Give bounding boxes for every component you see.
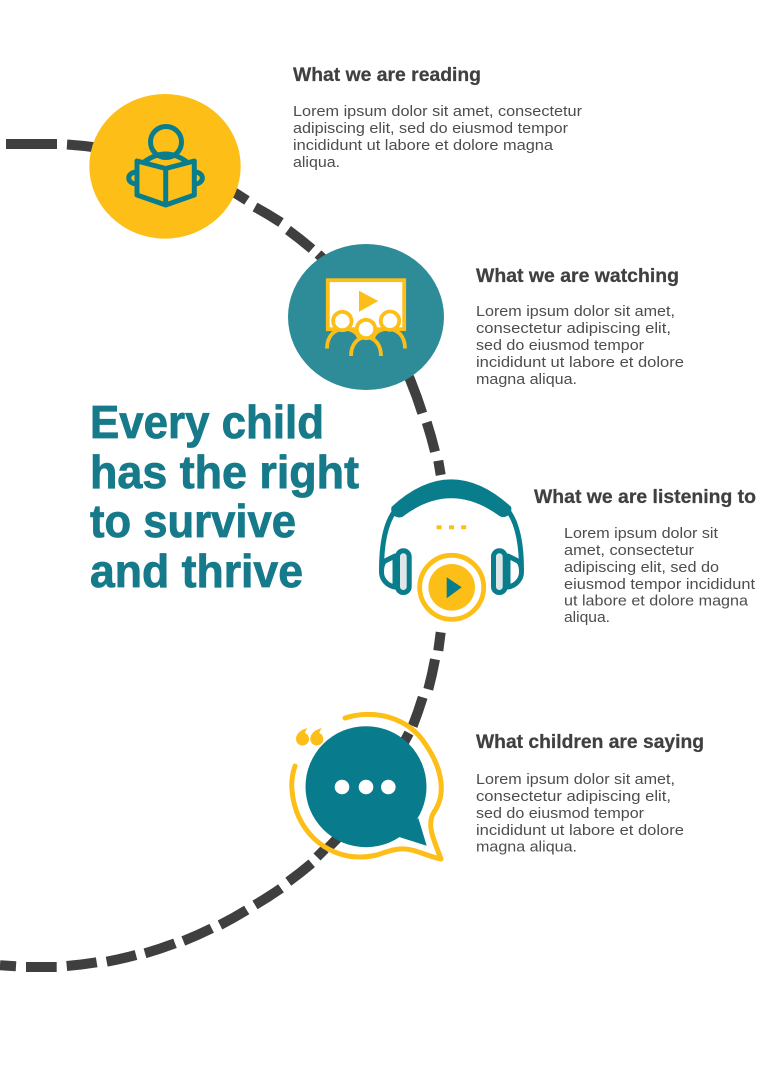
text block: children saying: What children are saying xyxy=(476,731,704,753)
text block: reading: incididunt ut labore et dolore magna xyxy=(293,137,554,154)
text block: watching: magna aliqua. xyxy=(476,371,577,388)
text block: children saying xyxy=(476,731,704,856)
headline: to survive xyxy=(90,495,296,547)
text block: children saying: Lorem ipsum dolor sit amet, xyxy=(476,771,675,788)
text block: watching: sed do eiusmod tempor xyxy=(476,337,644,354)
text block: watching: consectetur adipiscing elit, xyxy=(476,320,671,337)
text block: watching xyxy=(476,265,684,388)
watching circle with icon xyxy=(288,244,444,390)
text block: listening: What we are listening to xyxy=(534,486,756,508)
text block: watching: What we are watching xyxy=(476,265,679,287)
text block: watching: incididunt ut labore et dolore xyxy=(476,354,684,371)
text block: children saying: incididunt ut labore et dolore xyxy=(476,822,684,839)
text block: listening: aliqua. xyxy=(564,609,610,626)
text block: watching: Lorem ipsum dolor sit amet, xyxy=(476,303,675,320)
text block: listening: ut labore et dolore magna xyxy=(564,592,749,610)
icon: speech bubble with quotes xyxy=(292,714,441,859)
dashed circular path xyxy=(0,144,441,967)
text block: children saying: sed do eiusmod tempor xyxy=(476,805,644,822)
text block: reading: aliqua. xyxy=(293,154,340,171)
text block: listening: amet, consectetur xyxy=(564,542,694,559)
headline xyxy=(90,396,359,597)
text block: listening xyxy=(534,486,756,626)
icon: headphones with play button xyxy=(382,479,522,619)
text block: reading: adipiscing elit, sed do eiusmod tempor xyxy=(293,120,568,137)
text block: children saying: magna aliqua. xyxy=(476,838,577,856)
text block: reading xyxy=(293,64,582,171)
text block: reading: What we are reading xyxy=(293,64,481,86)
headline: Every child xyxy=(90,396,324,448)
text block: children saying: consectetur adipiscing elit, xyxy=(476,788,671,805)
icon: person reading a book xyxy=(129,126,202,205)
text block: listening: adipiscing elit, sed do xyxy=(564,559,719,576)
text block: listening: Lorem ipsum dolor sit xyxy=(564,525,719,542)
text block: listening: eiusmod tempor incididunt xyxy=(564,576,756,593)
headline: and thrive xyxy=(90,545,303,597)
reading circle with icon xyxy=(89,94,241,239)
text block: reading: Lorem ipsum dolor sit amet, consectetur xyxy=(293,103,582,120)
headline: has the right xyxy=(90,446,359,498)
icon: audience watching a screen xyxy=(327,280,405,356)
